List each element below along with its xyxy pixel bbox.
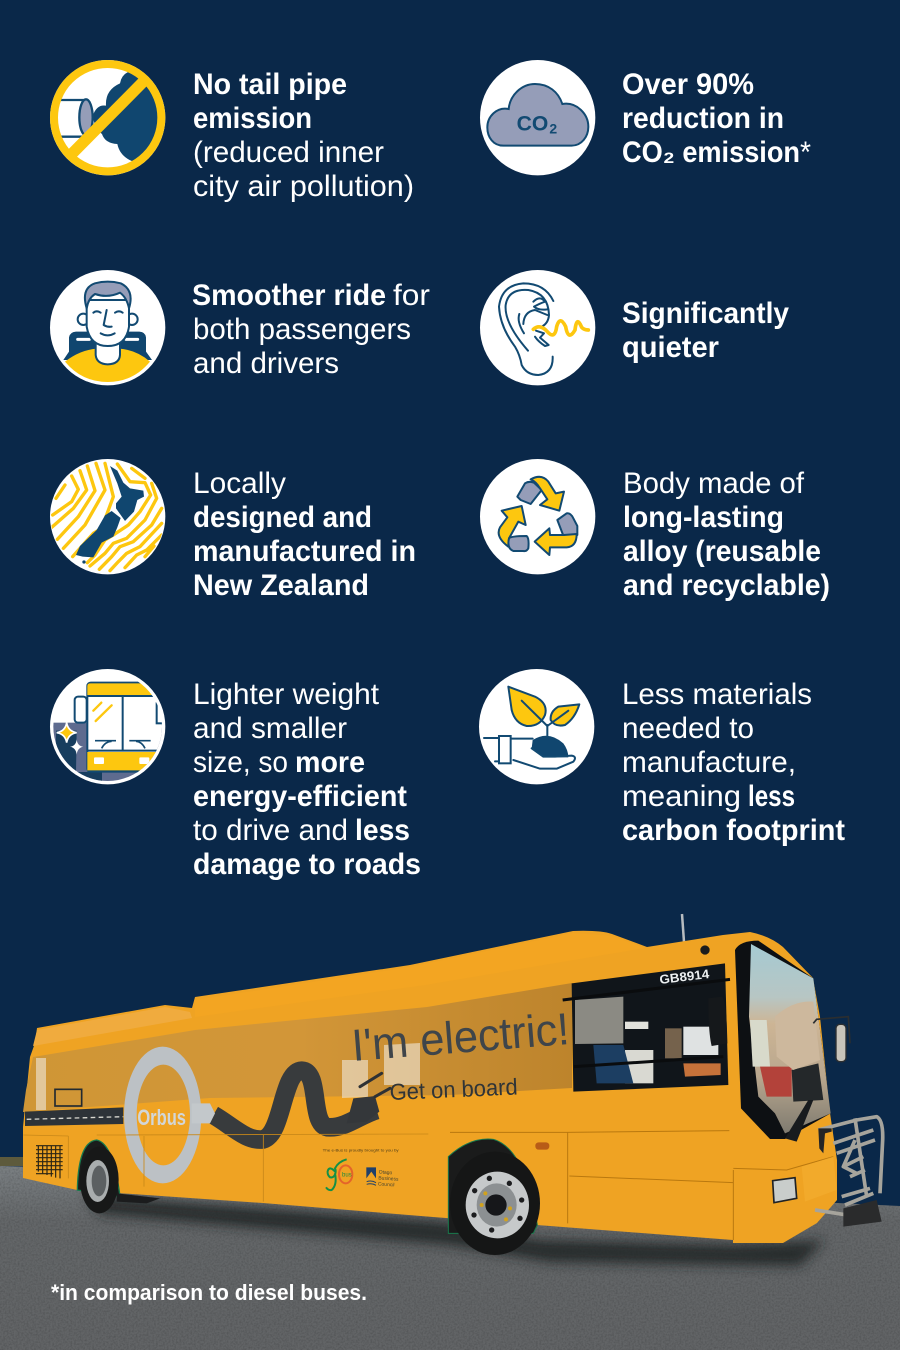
text: locally designed: designed and xyxy=(193,501,372,534)
icon: CO2 cloud xyxy=(480,60,595,175)
rear wheel xyxy=(80,1147,119,1213)
text: CO2 reduction: CO₂ emission xyxy=(622,136,800,169)
Otago logo: Council xyxy=(378,1181,395,1188)
text: lighter weight: Lighter weight xyxy=(193,678,379,711)
text: no tail pipe emission xyxy=(193,68,414,203)
body front highlight xyxy=(802,1157,837,1202)
road stripe xyxy=(25,1107,123,1126)
cable xyxy=(213,1071,377,1140)
text: lighter weight: and smaller xyxy=(193,712,347,745)
text: smoother ride: for xyxy=(393,279,430,312)
bus body xyxy=(23,931,837,1243)
text: less materials: meaning xyxy=(622,780,741,813)
text: lighter weight xyxy=(193,678,421,881)
text: locally designed xyxy=(193,467,416,602)
plug tip xyxy=(192,1103,215,1123)
icon: ear xyxy=(480,270,595,385)
icon: recycling arrows xyxy=(480,459,595,574)
interior mirror xyxy=(708,997,727,1046)
right body detail xyxy=(448,941,883,1255)
text: locally designed: manufactured in xyxy=(193,535,416,568)
text: no tail pipe emission: (reduced inner xyxy=(193,136,384,169)
go bus logo: bus xyxy=(342,1173,352,1179)
text: less materials xyxy=(622,678,845,847)
bus photo illustration xyxy=(23,914,883,1266)
text: body alloy: and recyclable) xyxy=(623,569,830,602)
text: lighter weight: more xyxy=(295,746,365,779)
antenna xyxy=(682,914,684,942)
left body artwork xyxy=(23,1047,428,1213)
headlight xyxy=(773,1178,797,1203)
marker light xyxy=(535,1142,549,1150)
text: less materials: needed to xyxy=(622,712,754,745)
Orbus ring xyxy=(124,1047,201,1183)
rear wheel arch xyxy=(77,1140,120,1197)
text: less materials: carbon footprint xyxy=(622,814,845,847)
front wheel xyxy=(448,1139,537,1233)
panel lines xyxy=(23,1134,428,1202)
upper reflections xyxy=(36,1043,420,1110)
ground xyxy=(0,1157,900,1350)
icon: bus front xyxy=(50,669,171,789)
icon: driver xyxy=(50,270,165,385)
text: lighter weight: less xyxy=(355,814,410,847)
upper body window zone xyxy=(23,983,572,1112)
text: body alloy: alloy (reusable xyxy=(623,535,821,568)
text: CO2 reduction: reduction in xyxy=(622,102,784,135)
window scenes xyxy=(575,997,623,1044)
text: CO2 reduction: * xyxy=(800,136,811,169)
small bus graphic xyxy=(55,1089,82,1106)
text: less materials: Less materials xyxy=(622,678,812,711)
text: lighter weight: energy-efficient xyxy=(193,780,407,813)
text: smoother ride: both passengers xyxy=(193,313,411,346)
side mirror xyxy=(813,1017,850,1043)
slogan: I'm electric xyxy=(350,1003,571,1105)
text: body alloy: Body made of xyxy=(623,467,805,500)
text: locally designed: Locally xyxy=(193,467,286,500)
icon: New Zealand map xyxy=(50,459,165,574)
text: no tail pipe emission: city air pollution) xyxy=(193,170,414,203)
bike rack xyxy=(815,1117,883,1215)
icon: CO2 cloud: 2 xyxy=(549,121,557,137)
Otago logo xyxy=(366,1167,400,1189)
text: lighter weight: to drive and xyxy=(193,814,348,847)
icon: no tail pipe emission xyxy=(50,60,165,175)
text: quieter: quieter xyxy=(622,331,720,364)
text: less materials: less xyxy=(748,780,795,813)
text: smoother ride: Smoother ride xyxy=(192,279,386,312)
text: no tail pipe emission: No tail pipe xyxy=(193,68,347,101)
roof highlights xyxy=(33,1007,192,1046)
Otago logo: Otago xyxy=(379,1169,393,1176)
slogan: I'm electric: I'm electric! xyxy=(350,1003,571,1071)
text: smoother ride xyxy=(192,279,430,380)
text: CO2 reduction xyxy=(622,68,811,169)
plug head xyxy=(347,1096,379,1123)
windscreen xyxy=(735,941,831,1139)
underbody xyxy=(117,1193,160,1203)
side panel lines xyxy=(450,1131,833,1240)
registration: GB8914 xyxy=(659,967,710,987)
bus shadow xyxy=(85,1195,825,1266)
text: body alloy: long-lasting xyxy=(623,501,784,534)
go bus logo xyxy=(326,1159,352,1190)
text: CO2 reduction: Over 90% xyxy=(622,68,754,101)
slogan: I'm electric: Get on board xyxy=(389,1073,518,1105)
sponsor line: The e-Bus is proudly brought to you by xyxy=(323,1149,399,1153)
text: body alloy xyxy=(623,467,830,602)
text: locally designed: New Zealand xyxy=(193,569,369,602)
icon: plant in hand xyxy=(479,669,594,784)
text: smoother ride: and drivers xyxy=(193,347,339,380)
text: lighter weight: damage to roads xyxy=(193,848,421,881)
rear vent xyxy=(36,1146,63,1178)
text: quieter: Significantly xyxy=(622,297,790,330)
Otago logo: Business xyxy=(378,1175,399,1183)
side window xyxy=(572,963,728,1092)
icon: CO2 cloud: CO xyxy=(517,111,548,135)
footnote: *in comparison to diesel buses. xyxy=(51,1280,367,1305)
text: no tail pipe emission: emission xyxy=(193,102,312,135)
text: quieter xyxy=(622,297,790,364)
text: lighter weight: size, so xyxy=(193,746,288,779)
Orbus lettering: Orbus xyxy=(137,1105,186,1130)
text: less materials: manufacture, xyxy=(622,746,796,779)
